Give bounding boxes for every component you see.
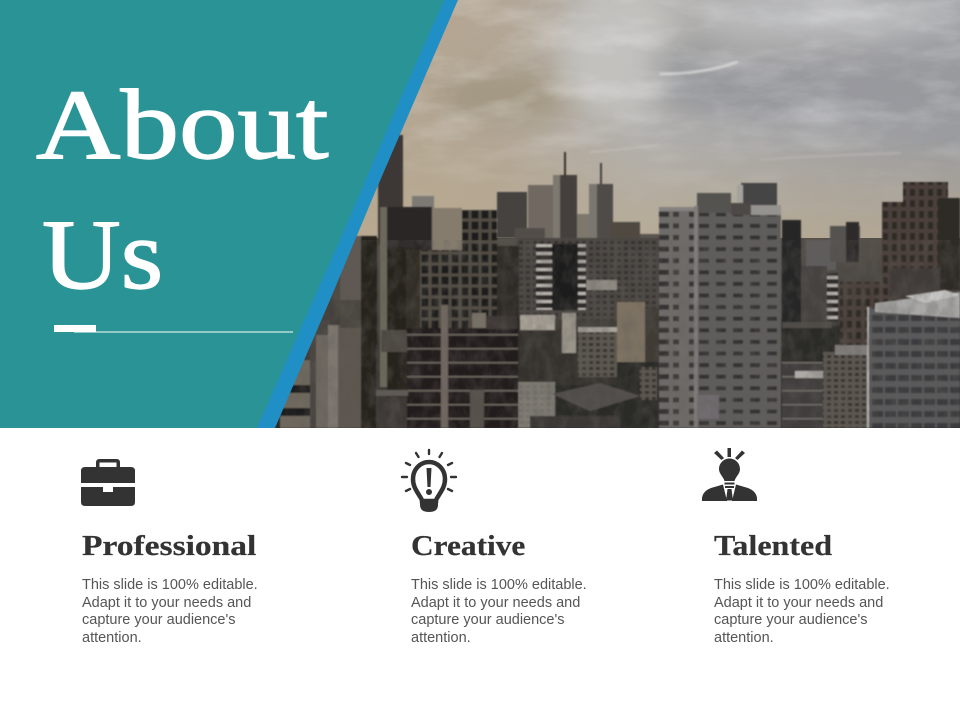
text: description: This slide is 100% editable. xyxy=(411,577,587,593)
panel: teal title shape xyxy=(0,0,444,428)
text: description: capture your audience's xyxy=(411,612,565,628)
main high-rise tower xyxy=(659,193,781,428)
distant towers xyxy=(378,135,960,346)
title xyxy=(36,69,328,310)
icon: light bulb with exclamation mark xyxy=(402,450,456,512)
text: description: This slide is 100% editable. xyxy=(82,577,258,593)
heading: Creative: Creative xyxy=(411,531,525,562)
text: description: attention. xyxy=(82,630,142,646)
text: description: attention. xyxy=(411,630,471,646)
text: description: Adapt it to your needs and xyxy=(714,595,883,611)
text: description: capture your audience's xyxy=(714,612,868,628)
text: description: Adapt it to your needs and xyxy=(411,595,580,611)
text: description: attention. xyxy=(714,630,774,646)
text: description: capture your audience's xyxy=(82,612,236,628)
title line: Us: Us xyxy=(42,199,163,310)
column: professional xyxy=(81,459,258,646)
text: description: This slide is 100% editable. xyxy=(714,577,890,593)
column: talented xyxy=(702,448,890,646)
photo: city skyline xyxy=(240,0,960,428)
heading: Talented: Talented xyxy=(714,530,832,562)
sky with clouds xyxy=(356,0,960,238)
icon: person with light bulb head xyxy=(702,448,757,501)
icon: briefcase xyxy=(81,459,135,506)
text: description: Adapt it to your needs and xyxy=(82,595,251,611)
striped white building xyxy=(536,244,586,310)
heading: Professional: Professional xyxy=(82,530,257,561)
column: creative xyxy=(402,450,587,646)
shape: blue diagonal band xyxy=(250,0,458,428)
foreground left towers xyxy=(280,207,519,428)
midground blocks xyxy=(510,238,660,428)
midground city mass xyxy=(240,238,960,428)
grime texture over buildings xyxy=(280,240,960,428)
title line: About: About xyxy=(36,69,328,180)
right foreground buildings xyxy=(782,290,960,428)
divider accent xyxy=(54,325,293,332)
